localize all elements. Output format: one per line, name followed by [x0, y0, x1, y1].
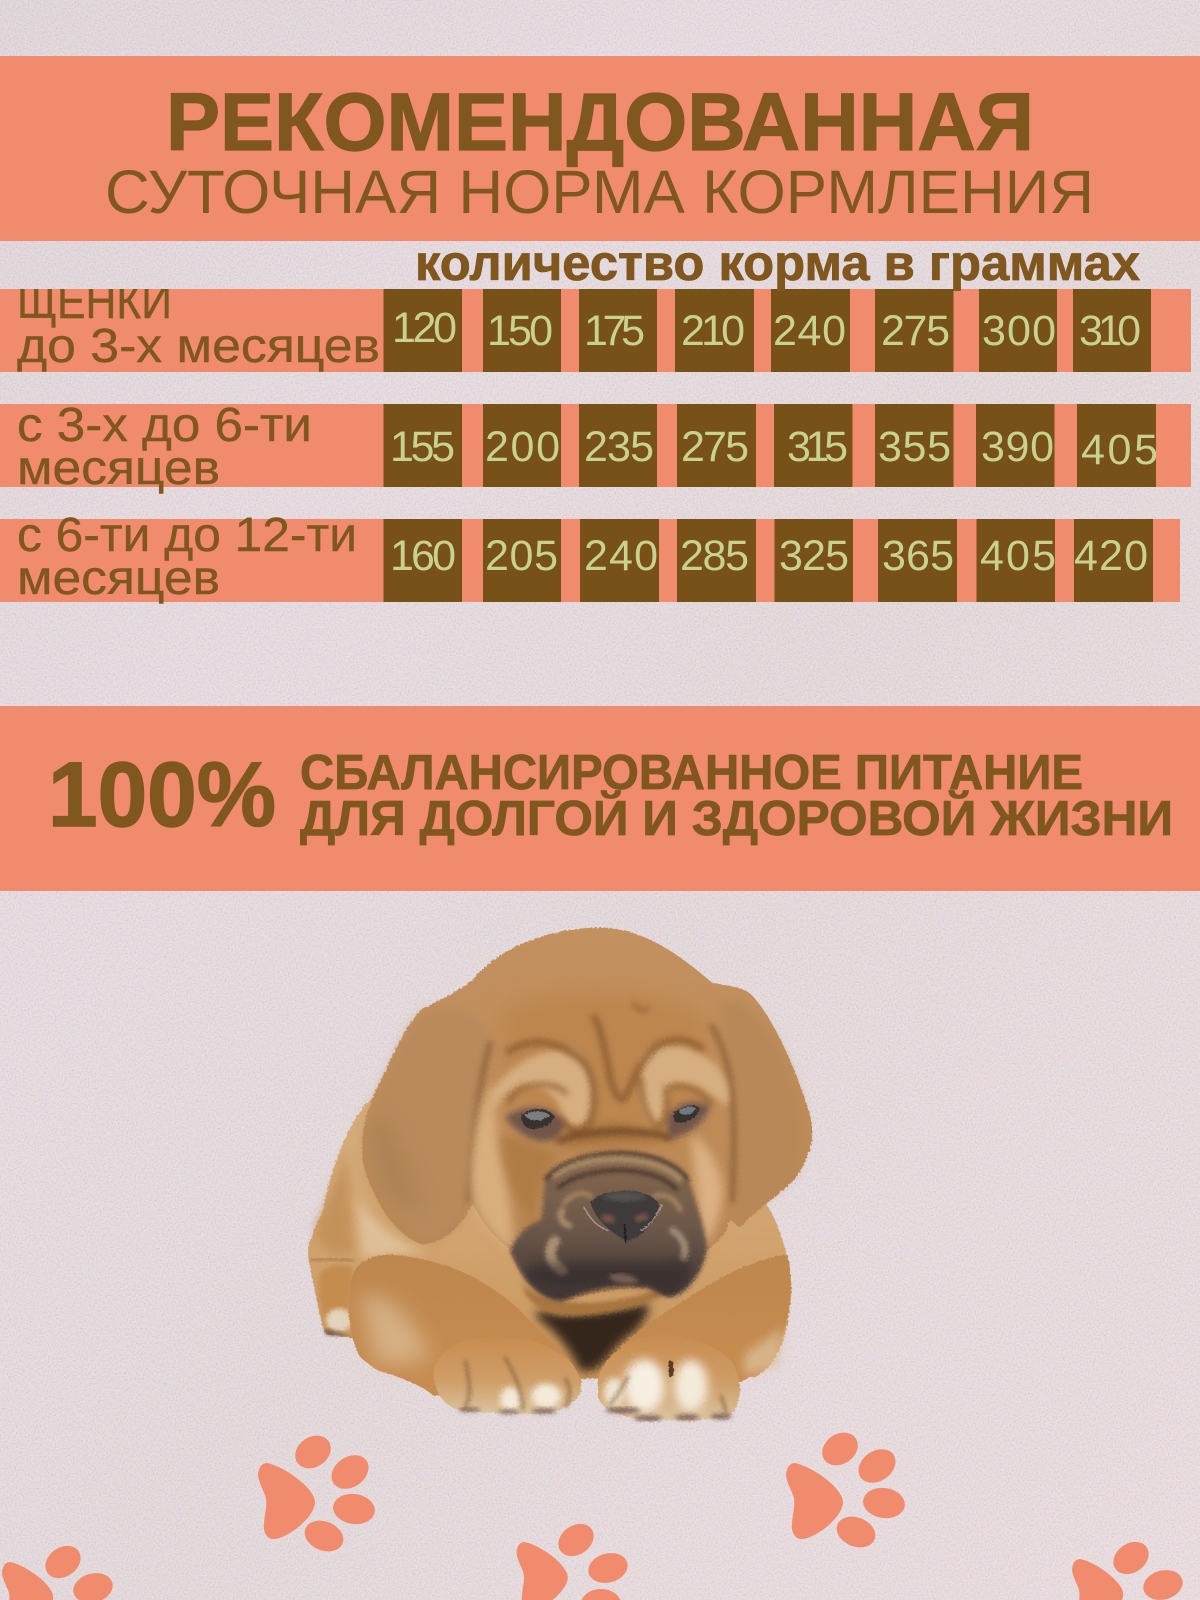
row values: 405: [1081, 426, 1158, 474]
paw left: [434, 1336, 581, 1414]
row values: 390: [981, 423, 1054, 471]
heading: subtitle: СУТОЧНАЯ НОРМА КОРМЛЕНИЯ: [105, 158, 1094, 226]
row values: 235: [584, 423, 654, 471]
row values: [392, 304, 1141, 355]
big number: 100%: 100%: [48, 744, 276, 846]
row values: 325: [779, 532, 849, 580]
face cheeks: [471, 1083, 513, 1251]
row: 3 to 6 months: [0, 399, 1191, 495]
row values: 275: [881, 307, 950, 355]
heading: amount of food in grams: количество корма в граммах: [415, 235, 1140, 291]
slogan: ДЛЯ ДОЛГОЙ И ЗДОРОВОЙ ЖИЗНИ: [300, 791, 1173, 846]
row values: 210: [681, 307, 745, 355]
wrinkle lines: [509, 1003, 710, 1141]
slogan: СБАЛАНСИРОВАННОЕ ПИТАНИЕ: [300, 746, 1083, 800]
illustration: puppy: [308, 928, 812, 1421]
row: 6 to 12 months: [0, 509, 1180, 605]
row values: 120: [392, 304, 457, 352]
row: up to 3 months: [0, 289, 1191, 372]
icon: paw print 1: [258, 1429, 377, 1557]
panel: title band: [0, 56, 1200, 241]
table: feeding norms: [0, 276, 1191, 605]
icon: paw print 3: [517, 1517, 631, 1600]
forehead tone: [500, 990, 710, 1148]
row values: 160: [390, 532, 456, 580]
row values: 150: [487, 307, 553, 355]
row values: 275: [681, 423, 749, 471]
left eye: [505, 1107, 564, 1141]
row values: 310: [1079, 307, 1141, 355]
row values: 300: [982, 307, 1056, 355]
muzzle wrinkles: [546, 1153, 687, 1270]
jowl shadow: [526, 1258, 691, 1291]
left ear shading: [367, 1010, 491, 1241]
row values: 175: [584, 307, 645, 355]
nose: [591, 1191, 659, 1241]
row values: 240: [584, 532, 658, 580]
chest shadow: [537, 1303, 649, 1371]
paw right: [598, 1335, 740, 1420]
row values: 205: [485, 532, 558, 580]
muzzle: [510, 1152, 707, 1301]
row label: [17, 509, 357, 605]
brow fold left: [491, 1050, 596, 1126]
row values: 155: [390, 423, 455, 471]
row values: 240: [773, 307, 846, 355]
slogan: [300, 746, 1173, 846]
brow fold right: [641, 1046, 728, 1124]
row label: ЩЕНКИ: [17, 276, 172, 329]
neck fur under jowls: [523, 1286, 660, 1316]
row label: до 3-х месяцев: [17, 320, 380, 373]
row label: с 3-х до 6-ти: [17, 399, 312, 452]
row values: [390, 532, 1148, 580]
row label: [17, 399, 312, 495]
heading: main title: РЕКОМЕНДОВАННАЯ: [166, 77, 1034, 168]
icon: paw print 2: [786, 1426, 907, 1553]
row values: [390, 423, 1158, 474]
row values: 355: [878, 423, 951, 471]
paw highlights and toes: [459, 1358, 732, 1421]
row values: 420: [1074, 532, 1148, 580]
row values: 200: [485, 423, 560, 471]
icon: paw print 5: [1072, 1535, 1186, 1600]
row values: 315: [787, 423, 848, 471]
row values: 405: [980, 532, 1056, 580]
right eye: [667, 1102, 710, 1138]
right ear shading: [719, 1000, 803, 1220]
forearm left: [349, 1255, 582, 1396]
row label: месяцев: [17, 552, 220, 605]
icon: paw print 4: [2, 1539, 116, 1600]
forearm right: [598, 1255, 791, 1382]
head: [362, 928, 812, 1301]
panel: balanced nutrition band: [0, 706, 1200, 891]
body: [308, 1072, 792, 1380]
row label: с 6-ти до 12-ти: [17, 509, 357, 562]
row values: 285: [680, 532, 749, 580]
row label: месяцев: [17, 442, 220, 495]
row label: [17, 289, 378, 372]
row values: 365: [882, 532, 954, 580]
ear edge creases: [469, 1024, 734, 1203]
